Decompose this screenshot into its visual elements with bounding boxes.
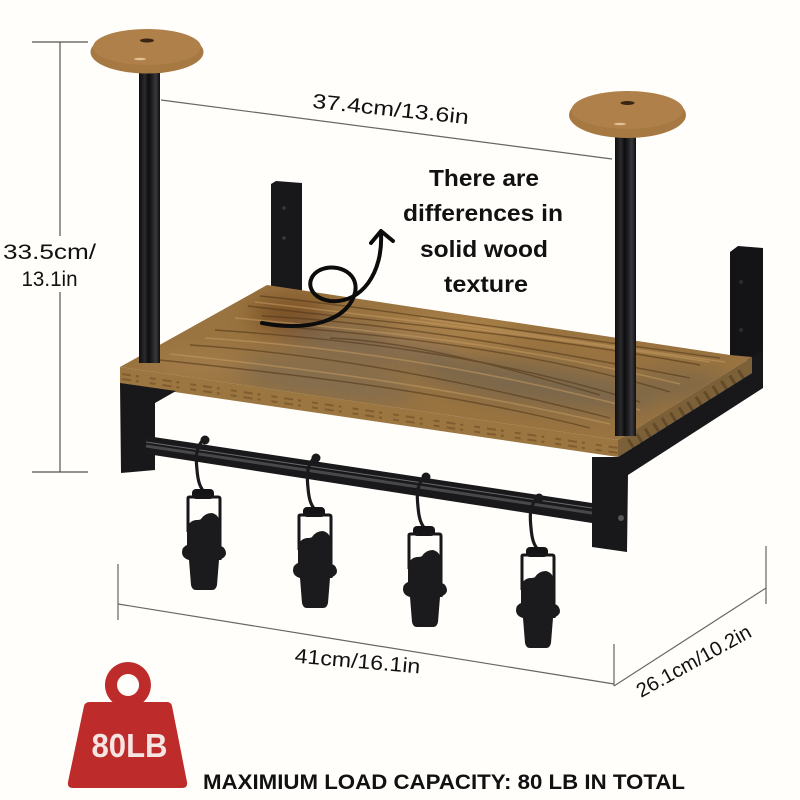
maximum load capacity caption: MAXIMIUM LOAD CAPACITY: 80 LB IN TOTAL: [203, 771, 685, 794]
height label: [3, 241, 96, 291]
wood texture note: texture: [444, 271, 528, 297]
height label: 13.1in: [22, 268, 78, 291]
right support pole: [615, 132, 636, 436]
left support pole: [139, 68, 160, 363]
bracket rivet: [618, 515, 624, 521]
left round wooden disc: [90, 29, 204, 74]
wood texture note: There are: [429, 165, 539, 191]
weight icon: 80LB: 80LB: [92, 727, 168, 764]
shelf width label: 41cm/16.1in: [294, 645, 421, 678]
hanging clip 4: [516, 494, 560, 648]
height label: 33.5cm/: [3, 241, 96, 264]
wood texture note: solid wood: [420, 236, 548, 262]
hanging clip 2: [293, 454, 337, 608]
wood texture note: differences in: [403, 200, 563, 226]
right black leg bracket: [592, 350, 763, 552]
wood texture note: [403, 165, 563, 297]
hanging clip 1: [182, 436, 226, 590]
left black leg bracket: [120, 383, 176, 473]
height dimension line: [32, 42, 88, 472]
right round wooden disc: [569, 91, 686, 138]
width between poles line: [161, 100, 612, 159]
hanging clip 3: [403, 472, 447, 627]
pole spacing label: 37.4cm/13.6in: [311, 90, 470, 129]
shelf width dimension line: [118, 564, 614, 686]
curly arrow: [262, 231, 393, 326]
weight icon: 80LB: [68, 662, 187, 788]
pole spacing label: [306, 87, 476, 133]
towel rail: [143, 436, 592, 523]
shelf depth label: 26.1cm/10.2in: [633, 621, 755, 702]
wooden shelf board: [110, 280, 760, 457]
back mounting bracket right: [730, 246, 763, 360]
shelf depth dimension line: [614, 546, 766, 686]
back mounting bracket left: [271, 181, 302, 292]
